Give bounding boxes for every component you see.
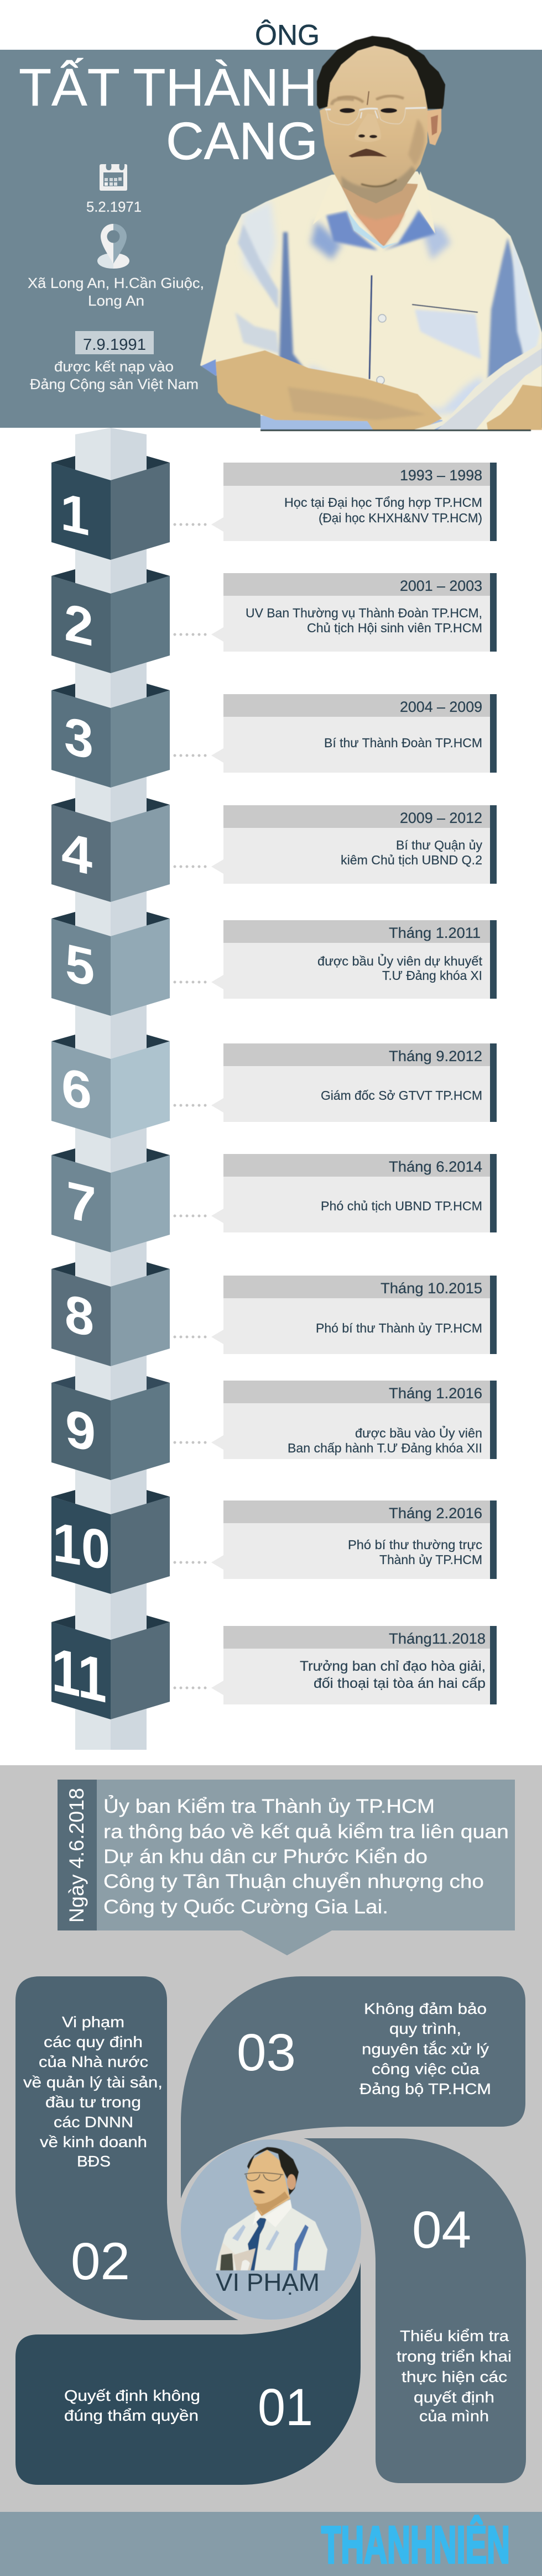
icon: calendar (100, 164, 127, 191)
glasses (325, 108, 426, 125)
title: ÔNG: ÔNG (255, 19, 320, 51)
small hair (247, 2147, 299, 2195)
step 10 card: Phó bí thư thường trực (348, 1538, 482, 1552)
step 7 connector dots (174, 1215, 207, 1217)
small shirt (216, 2200, 327, 2270)
step 2 cube (51, 569, 170, 673)
bottom edge (260, 429, 531, 431)
petal 01 (15, 2263, 361, 2485)
step 8 card: Phó bí thư Thành ủy TP.HCM (316, 1321, 482, 1335)
portrait: main figure (200, 36, 542, 431)
birth date: 5.2.1971 (86, 198, 142, 215)
party admission text: được kết nạp vào (54, 358, 174, 375)
step 11 card (211, 1626, 497, 1704)
step 4 card: Bí thư Quận ủy (396, 838, 482, 852)
step 7 card: Tháng 6.2014 (389, 1158, 482, 1175)
step 8 connector dots (174, 1335, 207, 1339)
step 11 card: Tháng11.2018 (389, 1630, 486, 1647)
step 6 cube: 6 (61, 1057, 92, 1122)
step 10 card: Thành ủy TP.HCM (379, 1552, 482, 1567)
petal 02: về quản lý tài sản, (23, 2074, 163, 2091)
birthplace (28, 275, 204, 309)
step 1 cube: 1 (60, 482, 90, 547)
party admission date: 7.9.1991 (83, 336, 146, 354)
notice box (58, 1780, 515, 1955)
step 4 cube (51, 798, 170, 902)
nose (355, 113, 381, 142)
step 11 card: đối thoại tại tòa án hai cấp (314, 1676, 486, 1691)
petal 04: trong triển khai (397, 2348, 512, 2365)
ear (428, 109, 441, 145)
label: VI PHẠM: VI PHẠM (216, 2268, 320, 2296)
step 10 card (211, 1501, 497, 1579)
step 7 cube: 7 (66, 1171, 96, 1236)
step 9 card: được bầu vào Ủy viên (355, 1425, 482, 1440)
step 6 connector dots (174, 1104, 207, 1106)
petal 02: của Nhà nước (39, 2053, 148, 2070)
petal 02: Vi phạm (62, 2013, 124, 2031)
notice box: Ngày 4.6.2018 (65, 1788, 88, 1923)
petal 03: 03 (237, 2023, 296, 2082)
petal 03: Không đảm bảo (364, 2000, 487, 2017)
step 4 cube: 4 (61, 821, 92, 886)
step 2 card: 2001 – 2003 (400, 578, 482, 594)
petal 04: thực hiện các (402, 2368, 507, 2385)
right hand (487, 385, 542, 430)
step 5 cube (51, 912, 170, 1016)
shirt placket (369, 275, 372, 379)
petal 04: quyết định (414, 2389, 494, 2406)
portrait: small figure (216, 2147, 327, 2270)
step 4 card: 2009 – 2012 (400, 810, 482, 826)
petal 02: các quy định (44, 2033, 143, 2050)
shirt pocket line (412, 305, 478, 312)
step 9 cube: 9 (65, 1398, 96, 1463)
petal 02: 02 (71, 2232, 130, 2291)
step 11 card: Trưởng ban chỉ đạo hòa giải, (300, 1659, 486, 1674)
step 3 card: 2004 – 2009 (400, 699, 482, 715)
step 4 card: kiêm Chủ tịch UBND Q.2 (341, 853, 482, 867)
step 10 cube (51, 1490, 170, 1594)
step 3 card: Bí thư Thành Đoàn TP.HCM (324, 736, 482, 750)
step 1 card: Học tại Đại học Tổng hợp TP.HCM (284, 495, 482, 510)
step 8 cube: 8 (65, 1283, 94, 1349)
shirt (200, 171, 542, 430)
step 5 cube: 5 (65, 933, 95, 998)
violations section background (0, 1765, 542, 2512)
party admission text: Đảng Cộng sản Việt Nam (30, 376, 199, 392)
step 7 card: Phó chủ tịch UBND TP.HCM (321, 1199, 482, 1213)
title: TẤT THÀNH CANG: TẤT THÀNH (19, 58, 317, 117)
petal 02: về kinh doanh (40, 2133, 147, 2150)
step 10 connector dots (174, 1561, 207, 1564)
petal 03 (181, 1976, 525, 2199)
small mouth (253, 2190, 265, 2194)
petal 04: của mình (419, 2407, 489, 2425)
step 9 cube (51, 1376, 170, 1480)
centre circle (181, 2139, 361, 2320)
step 10 card: Tháng 2.2016 (389, 1505, 482, 1522)
step 5 card: Tháng 1.2011 (389, 925, 481, 941)
petal 01: 01 (258, 2378, 313, 2437)
petal 02: đầu tư trong (45, 2094, 141, 2111)
step 6 card: Giám đốc Sở GTVT TP.HCM (321, 1088, 482, 1103)
small ear (287, 2174, 296, 2190)
step 9 card: Tháng 1.2016 (389, 1385, 482, 1402)
step 8 card (211, 1276, 497, 1354)
notice box: ra thông báo về kết quả kiểm tra liên quan (103, 1821, 509, 1843)
petal 04: 04 (412, 2201, 471, 2259)
step 5 connector dots (174, 980, 207, 984)
timeline pillar (75, 428, 147, 1750)
petal 04: Thiếu kiểm tra (400, 2327, 509, 2344)
step 3 card (211, 694, 497, 773)
hair (317, 36, 445, 109)
petal 02: BĐS (77, 2153, 111, 2170)
petal 02 (15, 1976, 238, 2320)
party admission text (30, 358, 199, 392)
petal 04 (304, 2138, 526, 2483)
forearm (216, 350, 442, 431)
step 3 connector dots (174, 754, 207, 757)
step 8 cube (51, 1262, 170, 1366)
icon: location pin (97, 224, 129, 269)
petal 03: Đảng bộ TP.HCM (359, 2080, 491, 2097)
petal 02: các DNNN (54, 2113, 133, 2131)
step 2 connector dots (174, 633, 207, 636)
petal 03: công việc của (372, 2060, 480, 2077)
petal 03: nguyên tắc xử lý (362, 2040, 489, 2058)
step 1 card: (Đại học KHXH&NV TP.HCM) (319, 511, 482, 525)
step 1 cube (51, 456, 170, 560)
buttons (378, 314, 386, 322)
step 4 card (211, 805, 497, 884)
step 11 cube: 11 (51, 1634, 107, 1717)
small face (247, 2150, 290, 2214)
small collars (264, 2200, 291, 2227)
notice box: Ủy ban Kiểm tra Thành ủy TP.HCM (103, 1795, 435, 1817)
title: TẤT THÀNH CANG: CANG (166, 112, 318, 171)
title: TẤT THÀNH CANG (19, 58, 318, 171)
footer band (0, 2512, 542, 2576)
step 7 card (211, 1154, 497, 1232)
small tie (248, 2217, 267, 2270)
step 9 card: Ban chấp hành T.Ư Đảng khóa XII (288, 1441, 482, 1455)
small glasses (244, 2173, 283, 2181)
petal 01: đúng thẩm quyền (64, 2407, 199, 2424)
step 6 cube (51, 1035, 170, 1139)
notice box: Công ty Quốc Cường Gia Lai. (103, 1896, 388, 1918)
step 5 card (211, 920, 497, 999)
step 2 cube: 2 (64, 592, 93, 658)
step 11 connector dots (174, 1687, 207, 1689)
notice box: Công ty Tân Thuận chuyển nhượng cho (103, 1871, 484, 1892)
header band (0, 50, 542, 428)
step 9 card (211, 1381, 497, 1459)
step 2 card: Chủ tịch Hội sinh viên TP.HCM (307, 621, 482, 635)
step 6 card: Tháng 9.2012 (389, 1048, 482, 1064)
mouth (348, 149, 387, 158)
step 1 card (211, 463, 497, 541)
head skin (320, 46, 428, 203)
step 11 cube (51, 1615, 170, 1719)
step 5 card: được bầu Ủy viên dự khuyết (317, 953, 483, 968)
collar (312, 171, 435, 250)
step 2 card (211, 573, 497, 652)
step 7 cube (51, 1148, 170, 1252)
neck (341, 182, 419, 247)
paper (409, 343, 542, 431)
step 3 cube: 3 (64, 706, 93, 771)
step 3 cube (51, 684, 170, 788)
step 2 card: UV Ban Thường vụ Thành Đoàn TP.HCM, (246, 606, 482, 620)
party admission date (75, 331, 154, 354)
step 10 cube: 10 (53, 1511, 110, 1582)
step 9 connector dots (174, 1441, 207, 1444)
birthplace: Long An (88, 292, 144, 309)
brows and eyes (337, 91, 404, 113)
small neck (256, 2189, 290, 2216)
petal 03: quy trình, (389, 2020, 461, 2037)
step 5 card: T.Ư Đảng khóa XI (382, 968, 482, 983)
petal 01: Quyết định không (64, 2387, 200, 2404)
step 8 card: Tháng 10.2015 (381, 1280, 482, 1297)
step 1 card: 1993 – 1998 (400, 467, 482, 484)
step 1 connector dots (174, 523, 207, 526)
step 6 card (211, 1043, 497, 1122)
birthplace: Xã Long An, H.Cần Giuộc, (28, 275, 204, 291)
notice box: Dự án khu dân cư Phước Kiển do (103, 1846, 428, 1867)
microphones (218, 2243, 235, 2270)
step 4 connector dots (174, 865, 207, 868)
